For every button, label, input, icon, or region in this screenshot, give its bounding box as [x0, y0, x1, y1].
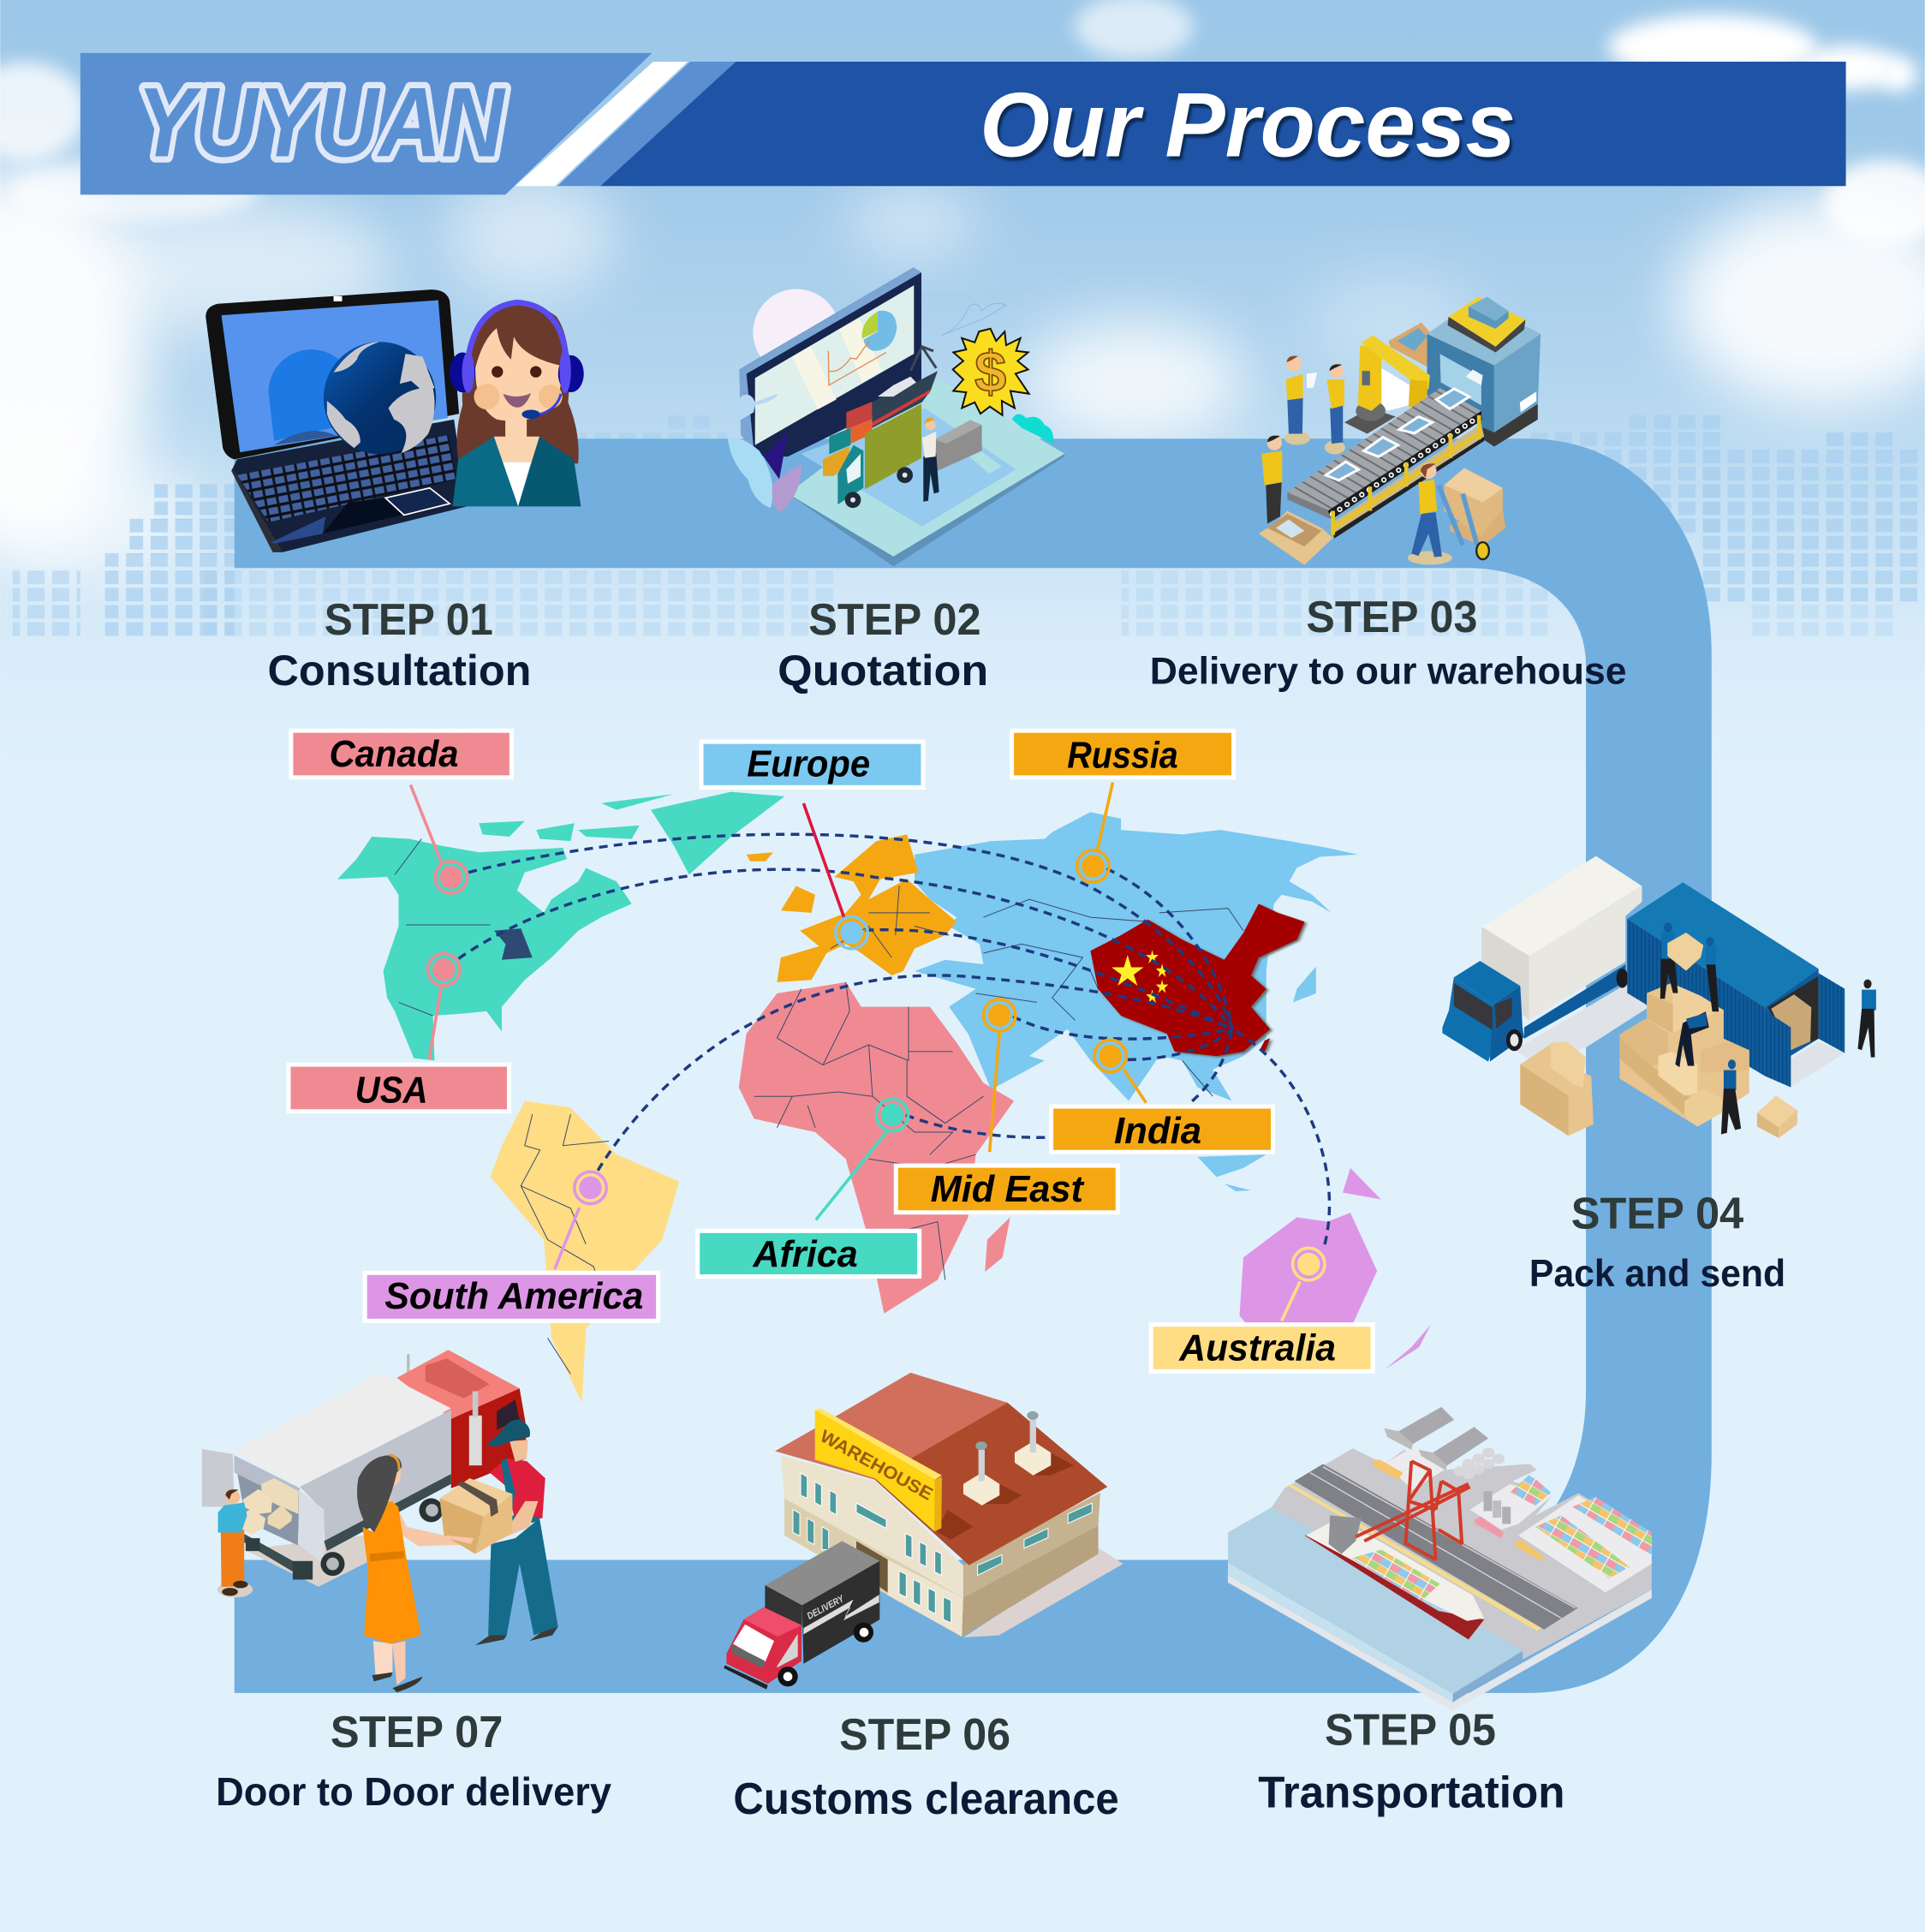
pink circle — [753, 289, 840, 376]
step 05 label — [1258, 1704, 1565, 1817]
Africa — [739, 982, 1014, 1314]
boxes and trolley — [1259, 468, 1505, 565]
label: Canada: Canada — [329, 734, 459, 775]
parcels in truck — [239, 1478, 298, 1535]
truck — [1442, 856, 1642, 1062]
illustration: step 02 quotation dashboard — [719, 268, 1064, 566]
label: Canada — [291, 730, 511, 778]
robot arm — [1344, 336, 1430, 434]
label: Europe: Europe — [747, 743, 870, 784]
crane — [1356, 1461, 1470, 1559]
logo: YUYUAN: YUYUAN — [137, 69, 506, 178]
step 04 label — [1529, 1188, 1785, 1295]
country borders — [395, 839, 1243, 1374]
delivery man with parcel — [439, 1420, 558, 1645]
shadow — [963, 1548, 1123, 1637]
step 02 label: STEP 02 — [808, 594, 981, 644]
step 01 label: STEP 01 — [325, 594, 493, 644]
South America — [491, 1100, 679, 1403]
label: Europe — [701, 742, 923, 787]
step 01 label: Consultation — [268, 646, 531, 695]
delivery truck — [724, 1541, 879, 1690]
silos and trucks — [1373, 1460, 1544, 1561]
illustration: step 03 factory conveyor — [1259, 297, 1541, 565]
step 03 label: Delivery to our warehouse — [1150, 651, 1627, 693]
label: India — [1052, 1106, 1273, 1152]
label: Russia — [1012, 730, 1234, 778]
labels: top row — [268, 592, 1626, 695]
step 03 label: STEP 03 — [1306, 592, 1477, 641]
machine housing — [1427, 297, 1541, 447]
shipping container — [1627, 882, 1845, 1088]
dollar badge — [953, 329, 1029, 415]
illustration: step 01 laptop and agent — [206, 289, 584, 552]
stacked cartons — [1619, 983, 1749, 1127]
step 06 label: STEP 06 — [839, 1709, 1010, 1759]
step 05 label: Transportation — [1258, 1768, 1565, 1817]
step 07 label: STEP 07 — [331, 1707, 503, 1756]
shipping routes — [459, 834, 1329, 1244]
ground — [1514, 985, 1648, 1064]
connector lines — [410, 783, 1300, 1321]
step 02 label: Quotation — [778, 646, 988, 695]
label: South America: South America — [384, 1276, 643, 1317]
aprons — [1385, 1447, 1652, 1592]
customer in orange dress — [357, 1455, 469, 1692]
step 04 label: STEP 04 — [1571, 1188, 1743, 1237]
water — [1228, 1507, 1523, 1694]
loose carton stack — [1520, 1041, 1594, 1136]
conveyor belt — [1287, 388, 1484, 539]
cargo block — [935, 420, 982, 471]
base plate — [788, 379, 1064, 566]
label: Mid East: Mid East — [931, 1169, 1085, 1210]
step 07 label — [216, 1707, 611, 1814]
workers — [1660, 922, 1876, 1135]
step 06 label: Customs clearance — [733, 1774, 1119, 1823]
step 01 label — [268, 594, 531, 695]
windows — [793, 1473, 1092, 1623]
plant and leaves — [719, 303, 1053, 512]
illustration: step 06 warehouse and truck — [724, 1373, 1123, 1690]
worker — [922, 417, 939, 502]
label: Australia — [1151, 1325, 1373, 1371]
Asia — [915, 812, 1358, 1191]
title: Our Process: Our Process — [980, 75, 1516, 176]
label: Africa — [698, 1231, 920, 1277]
truck — [202, 1350, 527, 1587]
customer service agent — [450, 302, 584, 506]
label: Africa: Africa — [752, 1234, 858, 1275]
step 04 label: Pack and send — [1529, 1253, 1785, 1295]
workers — [1261, 356, 1452, 564]
logo panel — [80, 53, 652, 194]
title bar — [600, 62, 1846, 186]
label: Mid East — [896, 1166, 1117, 1213]
label: USA: USA — [355, 1070, 428, 1112]
location markers — [428, 850, 1325, 1280]
label: Australia: Australia — [1178, 1327, 1336, 1368]
sign: WAREHOUSE — [817, 1426, 936, 1505]
Europe — [747, 834, 957, 982]
light blue stripe — [557, 62, 736, 186]
delivery truck: DELIVERY — [806, 1594, 847, 1622]
label: India: India — [1114, 1111, 1201, 1152]
storage bin — [1389, 323, 1430, 367]
illustration: step 05 port — [1228, 1407, 1652, 1711]
step 05 label: STEP 05 — [1325, 1704, 1496, 1754]
Great Lakes — [494, 928, 533, 960]
label: USA — [289, 1064, 510, 1112]
continents — [337, 792, 1431, 1403]
sign — [815, 1409, 942, 1531]
single carton — [1757, 1096, 1797, 1138]
labels: bottom row — [216, 1704, 1565, 1823]
road — [1287, 1464, 1577, 1631]
process path band — [235, 438, 1712, 1693]
chimneys — [963, 1411, 1051, 1506]
platform edge — [1228, 1562, 1652, 1711]
step 03 label — [1150, 592, 1627, 693]
illustration: step 07 door to door delivery — [202, 1350, 558, 1692]
walls — [781, 1456, 1100, 1637]
delivery truck — [823, 402, 921, 508]
roof — [775, 1373, 1107, 1565]
China flag stars — [1111, 950, 1168, 1003]
illustration: step 04 truck and container loading — [1442, 856, 1876, 1138]
region labels — [289, 730, 1373, 1371]
header banner — [80, 53, 1846, 194]
step 02 label — [778, 594, 988, 695]
China — [1090, 903, 1304, 1056]
small worker — [218, 1489, 253, 1597]
step 06 label — [733, 1709, 1119, 1823]
Australia and New Zealand — [1239, 1168, 1431, 1369]
laptop — [206, 289, 467, 552]
North America — [337, 792, 784, 1060]
land — [1272, 1448, 1652, 1660]
dollar badge: $ — [974, 341, 1006, 404]
ship — [1304, 1516, 1484, 1639]
world map — [337, 783, 1431, 1403]
cargo ship — [872, 347, 938, 428]
warehouses — [1385, 1407, 1505, 1479]
container yard — [1510, 1474, 1652, 1578]
step 07 label: Door to Door delivery — [216, 1769, 611, 1814]
globe — [324, 342, 436, 454]
monitor — [739, 268, 921, 480]
white stripe — [516, 62, 688, 186]
label: Russia: Russia — [1067, 735, 1178, 776]
